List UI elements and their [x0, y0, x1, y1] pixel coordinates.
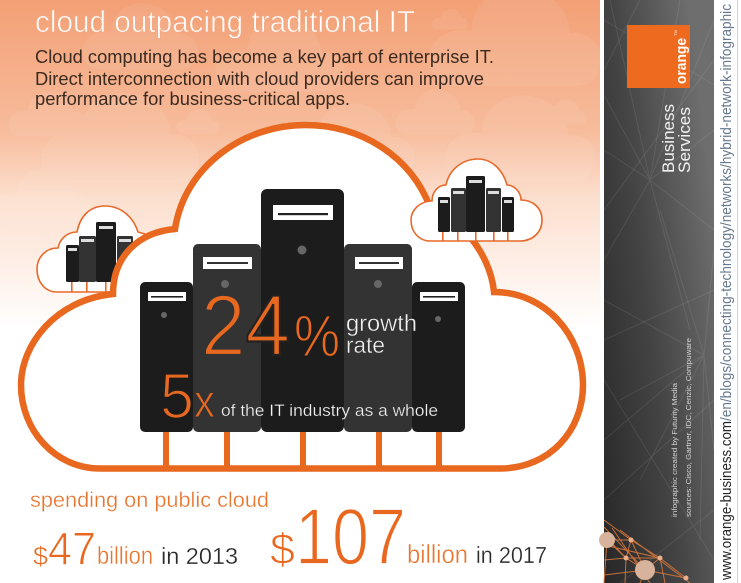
stat: 24% growth rate: % — [294, 304, 340, 369]
background panel — [0, 0, 600, 340]
small right cloud — [411, 159, 542, 241]
server 2 — [193, 244, 261, 432]
stat: 24% growth rate: 24 — [201, 278, 290, 374]
small left cloud — [37, 206, 145, 292]
logo: orange — [627, 25, 690, 88]
stat: 47 billion in 2013: 47 — [48, 522, 96, 574]
server 1 — [140, 282, 193, 432]
brand: Business Services: Business — [660, 104, 678, 173]
credits — [670, 338, 693, 517]
title: cloud outpacing traditional IT — [35, 4, 415, 39]
server rack — [140, 189, 465, 432]
server 4 — [344, 244, 412, 432]
server 3 — [261, 189, 344, 432]
stat: 107 billion in 2017: billion — [407, 539, 468, 569]
network graphic — [599, 520, 690, 583]
brand: Business Services — [660, 104, 694, 173]
stat: 5x of the IT industry — [160, 360, 438, 432]
background clouds — [0, 0, 601, 226]
credits: sources: Cisco, Gartner, IDC, Cenzic, Compuware — [684, 338, 693, 517]
stat: 107 billion in 2017: 107 — [295, 492, 406, 581]
brand: Business Services: Services — [676, 107, 694, 173]
stat: 24% growth rate: rate — [346, 332, 385, 358]
url strip: www.orange-business.com — [718, 421, 735, 581]
intro text — [35, 47, 494, 109]
stat: 5x of the IT industry: 5 — [160, 360, 194, 432]
server connectors — [163, 432, 442, 468]
intro text: Cloud computing has become a key part of enterprise IT. — [35, 47, 494, 67]
stat: 47 billion in 2013: in 2013 — [161, 543, 238, 569]
stat: 107 billion in 2017: in 2017 — [476, 542, 547, 568]
stat: 47 billion in 2013: $ — [33, 541, 49, 571]
server 5 — [412, 282, 465, 432]
stat: 107 billion in 2017: $ — [270, 525, 295, 574]
stat: 5x of the IT industry: x — [194, 375, 215, 427]
stat: 24% growth rate: growth — [346, 310, 417, 336]
sidebar panel — [599, 0, 714, 583]
intro text: performance for business-critical apps. — [35, 89, 350, 109]
stat: 107 billion in 2017 — [270, 492, 547, 581]
stat: 24% growth rate — [201, 278, 417, 374]
credits: infographic created by Futurity Media — [670, 382, 679, 517]
stat: 5x of the IT industry: of the IT industry as a whole — [221, 401, 438, 420]
logo: orange: TM — [673, 30, 678, 36]
logo: orange: orange — [674, 38, 690, 84]
stat: 47 billion in 2013: billion — [97, 542, 153, 570]
heading: spending on public cloud: spending on public cloud — [30, 489, 269, 512]
main cloud outline — [21, 125, 583, 468]
intro text: Direct interconnection with cloud providers can improve — [35, 69, 484, 89]
stat: 47 billion in 2013 — [33, 522, 238, 574]
